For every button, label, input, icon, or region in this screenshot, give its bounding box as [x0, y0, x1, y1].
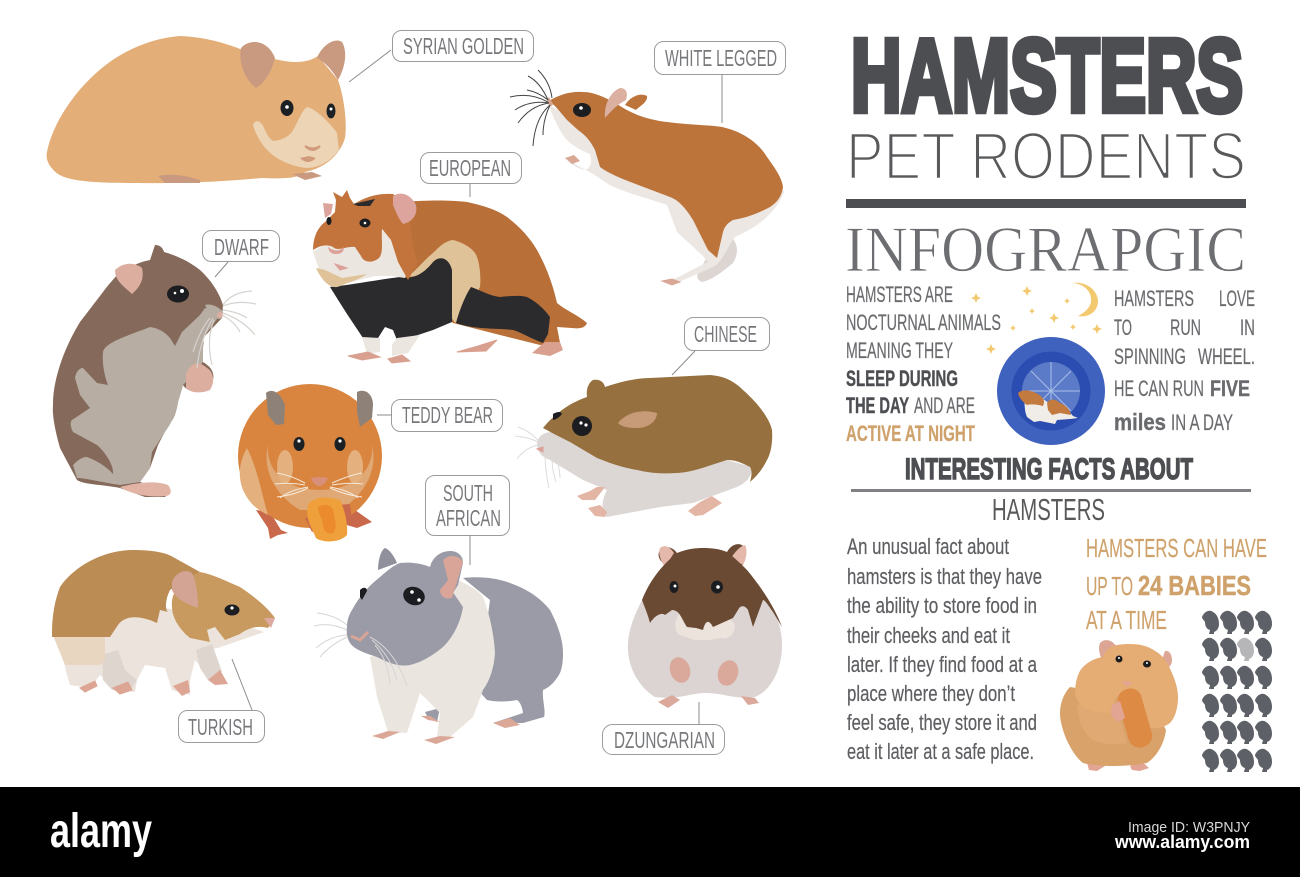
hamster: South African	[314, 548, 563, 744]
label: dwarf: DWARF	[214, 234, 269, 260]
hamster: Chinese	[515, 375, 772, 517]
label: South African: AFRICAN	[436, 505, 501, 531]
paragraph: unusual fact: eat it later at a safe place.	[847, 739, 1034, 764]
text block: spinning wheel: RUN	[1170, 315, 1201, 340]
text block: spinning wheel: WHEEL.	[1198, 344, 1255, 369]
paragraph: unusual fact: place where they don’t	[847, 681, 1015, 706]
text block: nocturnal: AND ARE	[914, 393, 975, 418]
text block: 24 babies: AT A TIME	[1086, 605, 1167, 635]
label: South African: SOUTH	[443, 480, 493, 506]
icon grid: 24 babies	[1202, 611, 1272, 772]
text block: nocturnal: SLEEP DURING	[846, 366, 958, 391]
hamster: Syrian golden	[47, 36, 346, 183]
label: European	[420, 152, 522, 197]
icon: hamster eating	[1060, 640, 1178, 771]
hamster: teddy bear	[238, 384, 382, 541]
label: Dzungarian: DZUNGARIAN	[614, 727, 715, 753]
footer bar: Image ID: W3PNJY	[1128, 819, 1250, 836]
heading: Infograpgic: INFOGRAPGIC	[845, 214, 1246, 286]
label: South African	[426, 476, 510, 565]
text block: spinning wheel: TO	[1114, 315, 1132, 340]
label: Chinese: CHINESE	[694, 321, 757, 347]
divider line	[851, 489, 1251, 492]
label: teddy bear: TEDDY BEAR	[402, 402, 493, 428]
hamster: Turkish	[52, 550, 275, 696]
text block: nocturnal: ACTIVE AT NIGHT	[846, 421, 975, 446]
paragraph: unusual fact: feel safe, they store it and	[847, 710, 1037, 735]
label: white legged	[654, 42, 786, 123]
label: teddy bear	[377, 400, 502, 432]
text block: nocturnal: MEANING THEY	[846, 338, 953, 363]
text block: spinning wheel: SPINNING	[1114, 344, 1186, 369]
footer bar: www.alamy.com	[1114, 832, 1250, 852]
text block: 24 babies: UP TO	[1086, 571, 1133, 601]
label: white legged: WHITE LEGGED	[665, 45, 777, 71]
label: Chinese	[672, 318, 770, 375]
text block: spinning wheel: IN A DAY	[1171, 410, 1233, 435]
label: dwarf	[202, 230, 280, 277]
text block: nocturnal: HAMSTERS ARE	[846, 282, 953, 307]
hamster: Dzungarian	[628, 544, 782, 708]
text block: nocturnal	[846, 282, 1001, 446]
paragraph: unusual fact	[847, 534, 1042, 764]
text block: spinning wheel: LOVE	[1219, 286, 1255, 311]
label: European: EUROPEAN	[429, 155, 511, 181]
icon: hamster wheel	[997, 337, 1105, 445]
text block: spinning wheel: IN	[1240, 315, 1255, 340]
subheading: hamsters: HAMSTERS	[992, 492, 1105, 527]
text block: 24 babies	[1086, 533, 1267, 635]
text block: spinning wheel: HE CAN RUN	[1114, 376, 1204, 401]
label: Dzungarian	[602, 702, 724, 754]
paragraph: unusual fact: their cheeks and eat it	[847, 623, 1010, 648]
paragraph: unusual fact: An unusual fact about	[847, 534, 1009, 559]
paragraph: unusual fact: hamsters is that they have	[847, 564, 1042, 589]
text block: spinning wheel: HAMSTERS	[1114, 286, 1194, 311]
text block: nocturnal: THE DAY	[846, 393, 909, 418]
text block: spinning wheel: FIVE	[1210, 376, 1250, 401]
text block: spinning wheel: miles	[1114, 409, 1166, 435]
footer bar: alamy	[50, 805, 152, 858]
divider bar	[846, 199, 1246, 208]
text block: 24 babies: 24 BABIES	[1138, 570, 1251, 601]
paragraph: unusual fact: the ability to store food in	[847, 593, 1037, 618]
label: Turkish	[178, 659, 264, 742]
label: Syrian golden	[349, 30, 534, 82]
text block: nocturnal: NOCTURNAL ANIMALS	[846, 310, 1001, 335]
label: Turkish: TURKISH	[188, 714, 253, 740]
text block: spinning wheel	[1114, 286, 1255, 435]
hamster: dwarf	[53, 245, 256, 497]
footer bar	[0, 787, 1300, 877]
paragraph: unusual fact: later. If they find food at a	[847, 652, 1038, 677]
icon: moon and stars	[971, 283, 1102, 354]
label: Syrian golden: SYRIAN GOLDEN	[403, 33, 524, 59]
hamster: European	[313, 190, 587, 363]
hamster: white legged	[510, 70, 784, 285]
